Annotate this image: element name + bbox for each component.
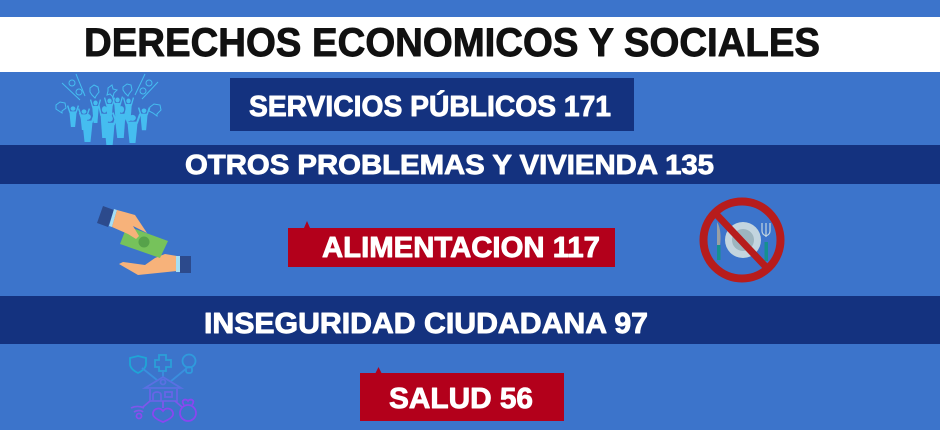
title xyxy=(0,17,940,72)
banner: servicios publicos: SERVICIOS PÚBLICOS 171 xyxy=(249,89,611,123)
banner: inseguridad ciudadana xyxy=(0,296,940,344)
title: DERECHOS ECONOMICOS Y SOCIALES xyxy=(84,21,820,65)
banner: alimentacion xyxy=(288,221,615,267)
icon: crowd protesting xyxy=(56,74,161,147)
banner: salud: SALUD 56 xyxy=(389,383,533,415)
banner: otros problemas y vivienda: OTROS PROBLEMAS Y VIVIENDA 135 xyxy=(185,149,714,180)
icon: hands exchanging money xyxy=(97,206,191,275)
icon: house with needs xyxy=(130,354,196,422)
banner: servicios publicos xyxy=(230,78,634,131)
banner: alimentacion: ALIMENTACION 117 xyxy=(322,232,600,264)
banner: salud xyxy=(360,367,564,421)
icon: no food xyxy=(704,202,780,278)
banner: otros problemas y vivienda xyxy=(0,145,940,184)
banner: inseguridad ciudadana: INSEGURIDAD CIUDADANA 97 xyxy=(204,308,648,340)
